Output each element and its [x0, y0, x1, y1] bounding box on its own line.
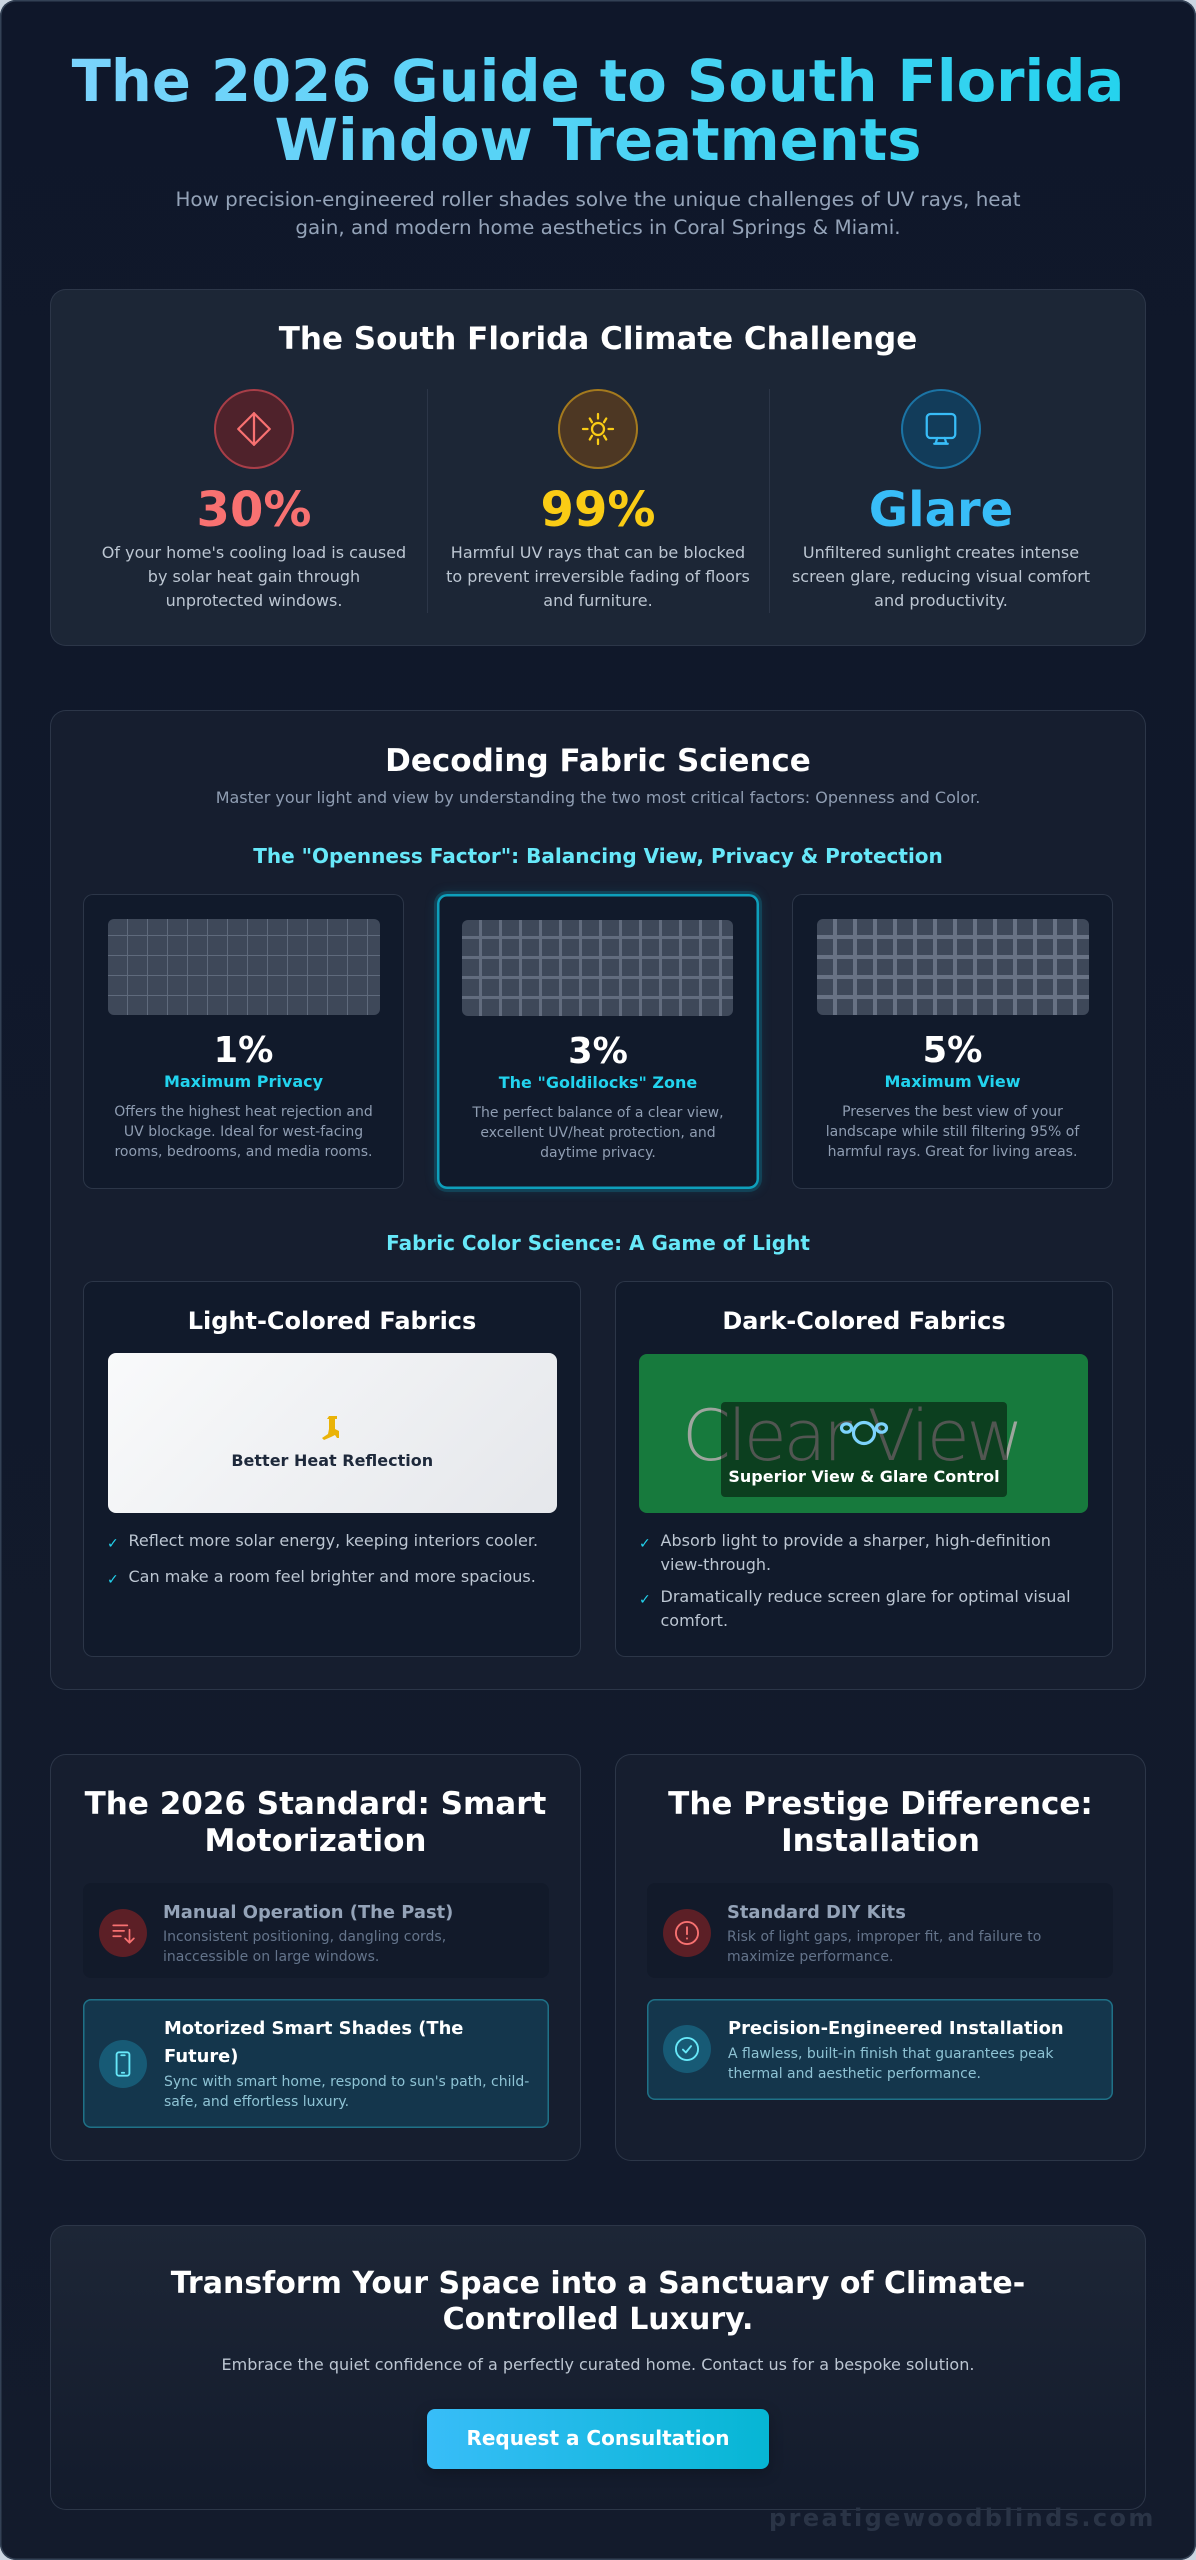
card: 3% goldilocks: [437, 894, 759, 1189]
text: glare: screen glare, reducing visual comfort: [792, 567, 1090, 586]
item: manual operation: [83, 1883, 549, 1978]
icon: sun: [558, 389, 638, 469]
bullet list: light fabrics: ✓: [107, 1536, 119, 1552]
text: 3% description: The perfect balance of a clear view,: [472, 1105, 724, 1121]
stat: 30% cooling load: [102, 389, 406, 610]
title: The 2026 Guide to South Florida: [72, 48, 1124, 115]
number: 30%: 30%: [197, 482, 311, 538]
heading: smart motorization: Motorization: [205, 1823, 426, 1859]
bullet list: dark fabrics: Absorb light to provide a sharper, high-definition: [660, 1531, 1051, 1550]
text: glare: and productivity.: [874, 591, 1008, 610]
text: glare: Unfiltered sunlight creates intense: [803, 543, 1079, 562]
title: DIY: Standard DIY Kits: [727, 1902, 906, 1923]
heading: fabric science: Decoding Fabric Science: [385, 743, 811, 779]
text: UV rays: Harmful UV rays that can be blocked: [451, 543, 745, 562]
text: precision: thermal and aesthetic performance.: [728, 2066, 981, 2082]
heading: installation: The Prestige Difference:: [668, 1786, 1093, 1822]
text: precision: A flawless, built-in finish that guarantees peak: [728, 2046, 1053, 2062]
icon: warning: [663, 1909, 711, 1957]
visual: heat reflection: [108, 1353, 557, 1513]
title: motorized: Future): [164, 2046, 238, 2067]
heading: climate challenge: The South Florida Climate Challenge: [279, 321, 917, 357]
number: 3%: 3%: [568, 1031, 628, 1072]
bullet list: dark fabrics: Dramatically reduce screen glare for optimal visual: [660, 1587, 1071, 1606]
bullet list: dark fabrics: ✓: [639, 1536, 651, 1552]
bullet list: dark fabrics: view-through.: [660, 1555, 771, 1574]
bullet list: light fabrics: [107, 1531, 538, 1588]
panel: smart motorization: [50, 1754, 581, 2161]
number: 5%: 5%: [923, 1030, 982, 1071]
icon: reflection glyph: [322, 1416, 339, 1440]
text: embrace: Embrace the quiet confidence of a perfectly curated home. Contact us for a bespoke solution.: [222, 2355, 974, 2374]
heading: smart motorization: The 2026 Standard: Smart: [85, 1786, 546, 1822]
panel: climate challenge: [50, 289, 1146, 646]
subtitle: gain, and modern home aesthetics in Coral Springs & Miami.: [295, 216, 901, 239]
title: Window Treatments: [274, 107, 922, 174]
watermark: preatigewoodblinds.com: [769, 2504, 1156, 2532]
subtitle: How precision-engineered roller shades solve the unique challenges of UV rays, heat: [175, 188, 1021, 211]
text: glare: [792, 543, 1090, 610]
icon: heat diamond: [214, 389, 294, 469]
label: maximum view: Maximum View: [884, 1072, 1021, 1091]
text: 3% description: excellent UV/heat protection, and: [480, 1125, 716, 1141]
text: UV rays: [446, 543, 750, 610]
card: 5% openness: [792, 894, 1113, 1189]
intro text: Master your light and view by understanding the two most critical factors: Openness and Color.: [216, 788, 980, 807]
number: Glare: Glare: [869, 482, 1013, 538]
item: motorized shades: [83, 1999, 549, 2128]
number: 1%: 1%: [214, 1030, 273, 1071]
bullet list: light fabrics: Can make a room feel brighter and more spacious.: [128, 1567, 536, 1586]
fabric swatch 5%: [816, 919, 1088, 1015]
stat: glare: [792, 389, 1090, 610]
bullet list: light fabrics: Reflect more solar energy, keeping interiors cooler.: [128, 1531, 538, 1550]
bullet list: dark fabrics: comfort.: [660, 1611, 728, 1630]
text: 1% description: Offers the highest heat rejection and: [114, 1104, 373, 1120]
text: 1% description: [114, 1104, 373, 1160]
item: precision installation: [647, 1999, 1113, 2100]
text: 3% description: [472, 1105, 724, 1161]
text: UV rays: and furniture.: [543, 591, 653, 610]
panel: call to action: [50, 2225, 1146, 2510]
icon: phone: [99, 2040, 147, 2088]
title: motorized: [164, 2018, 463, 2067]
text: 5% description: harmful rays. Great for living areas.: [828, 1144, 1077, 1160]
title: motorized: Motorized Smart Shades (The: [164, 2018, 463, 2039]
text: 5% description: landscape while still filtering 95% of: [826, 1124, 1079, 1140]
heading: light fabrics: Light-Colored Fabrics: [188, 1307, 476, 1335]
text: motorized: Sync with smart home, respond to sun's path, child-: [164, 2074, 529, 2090]
label: goldilocks zone: The "Goldilocks" Zone: [499, 1073, 697, 1092]
text: UV rays: to prevent irreversible fading of floors: [446, 567, 750, 586]
text: motorized: safe, and effortless luxury.: [164, 2094, 349, 2110]
icon: eye: [840, 1420, 888, 1446]
fabric swatch 1%: [108, 919, 380, 1015]
text: cooling load: unprotected windows.: [166, 591, 342, 610]
text: manual: [163, 1929, 446, 1965]
heading: transform your space: Transform Your Space into a Sanctuary of Climate-: [171, 2266, 1025, 2301]
text: 5% description: [826, 1104, 1080, 1160]
subheading: fabric color science: Fabric Color Science: A Game of Light: [386, 1231, 810, 1255]
text: manual: inaccessible on large windows.: [163, 1949, 379, 1965]
visual: clear view: [639, 1354, 1088, 1513]
subheading: openness factor: The "Openness Factor": Balancing View, Privacy & Protection: [253, 844, 943, 868]
heading: dark fabrics: Dark-Colored Fabrics: [722, 1307, 1006, 1335]
heading: transform your space: Controlled Luxury.: [443, 2302, 753, 2337]
text: DIY: Risk of light gaps, improper fit, and failure to: [727, 1929, 1041, 1945]
panel: installation: [615, 1754, 1146, 2161]
overlay box: [721, 1402, 1007, 1497]
text: DIY: [727, 1929, 1041, 1965]
bullet list: light fabrics: ✓: [107, 1572, 119, 1588]
stat: 99% UV: [446, 389, 750, 610]
heading: installation: [668, 1786, 1093, 1859]
text: motorized: [164, 2074, 529, 2110]
icon: manual cords: [99, 1909, 147, 1957]
text: cooling load: [102, 543, 406, 610]
text: 1% description: UV blockage. Ideal for west-facing: [124, 1124, 363, 1140]
text: 5% description: Preserves the best view of your: [842, 1104, 1063, 1120]
button: request a consultation: Request a Consultation: [466, 2426, 730, 2450]
heading: installation: Installation: [781, 1823, 980, 1859]
button: request a consultation: [427, 2409, 769, 2469]
text: cooling load: Of your home's cooling load is caused: [102, 543, 406, 562]
bullet list: dark fabrics: ✓: [639, 1592, 651, 1608]
heading: transform your space: [170, 2266, 1025, 2337]
card: dark fabrics: [615, 1281, 1113, 1657]
fabric swatch 3%: [462, 920, 733, 1016]
title: manual: Manual Operation (The Past): [163, 1902, 453, 1923]
heading: smart motorization: [84, 1786, 546, 1859]
text: 3% description: daytime privacy.: [540, 1145, 656, 1161]
label: better heat reflection: Better Heat Reflection: [231, 1451, 433, 1470]
text: DIY: maximize performance.: [727, 1949, 893, 1965]
card: light fabrics: [83, 1281, 581, 1657]
icon: monitor: [901, 389, 981, 469]
icon: check circle: [663, 2025, 711, 2073]
text: precision: [728, 2046, 1054, 2082]
title: [40, 52, 1156, 170]
subtitle: [175, 188, 1021, 239]
item: DIY kits: [647, 1883, 1113, 1978]
text: manual: Inconsistent positioning, dangling cords,: [163, 1929, 446, 1945]
backdrop words: Clear View: Clear View: [682, 1395, 1020, 1477]
title: precision: Precision-Engineered Installation: [728, 2018, 1064, 2039]
label: maximum privacy: Maximum Privacy: [164, 1072, 323, 1091]
text: cooling load: by solar heat gain through: [148, 567, 360, 586]
bullet list: dark fabrics: [639, 1531, 1071, 1630]
panel: decoding fabric science: [50, 710, 1146, 1690]
label: superior view: Superior View & Glare Control: [728, 1467, 1000, 1486]
number: 99%: 99%: [541, 482, 655, 538]
card: 1% openness: [83, 894, 404, 1189]
text: 1% description: rooms, bedrooms, and media rooms.: [114, 1144, 372, 1160]
